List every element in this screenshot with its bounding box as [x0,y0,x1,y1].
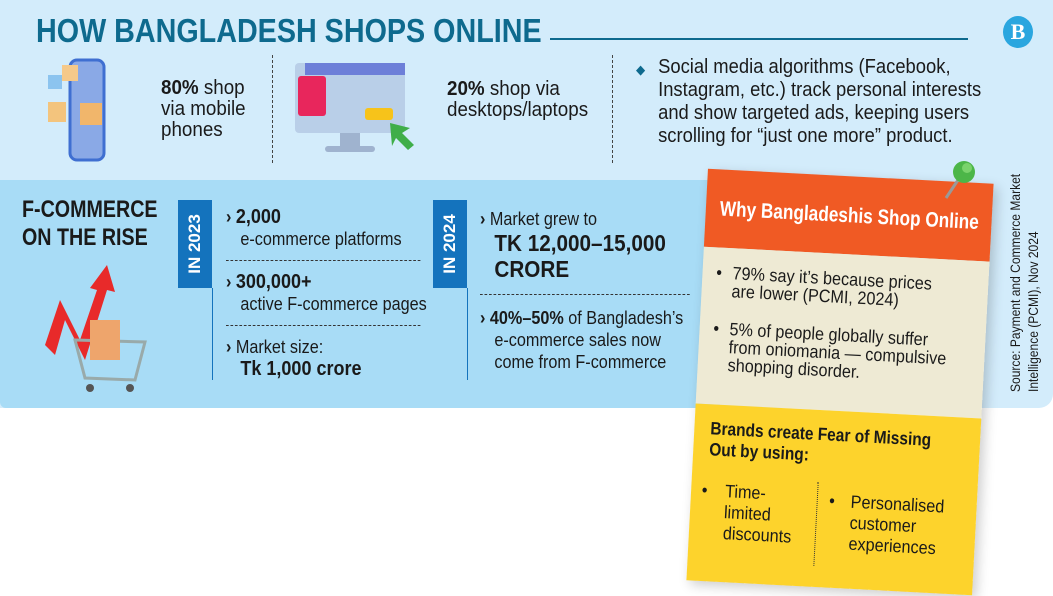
heading: ON THE RISE [22,224,148,251]
card facts: 79% say it’s because prices [732,263,932,294]
card fomo: Brands create Fear of Missing [710,418,932,450]
card fomo: • [701,480,708,500]
text: 20% desktop: 20% shop via [447,78,560,100]
text: social media: Instagram, etc.) track personal interests [658,79,981,101]
card header [704,169,994,262]
2023 items: e-commerce platforms [240,229,402,249]
text: 80% mobile: 80% shop [161,77,245,99]
card fomo [686,403,981,595]
source: Source: Payment and Commerce Market [1007,174,1023,392]
heading: F-COMMERCE [22,196,158,223]
card facts: shopping disorder. [727,355,860,382]
card fomo: Time- [725,481,766,503]
card facts: from oniomania — compulsive [728,337,947,369]
2023 items [226,206,427,380]
card: why bangladeshis shop [686,169,994,595]
text: social media [636,56,981,147]
tab: in 2023: IN 2023 [185,214,204,274]
2024 items: e-commerce sales now [494,330,661,350]
card fomo: Personalised [850,492,945,517]
card fomo: discounts [722,523,792,547]
card fomo: limited [724,502,771,525]
text: 80% mobile [161,77,246,141]
heading [22,196,158,251]
text: 80% mobile: phones [161,119,223,141]
2024 items [480,209,690,372]
2024 items: TK 12,000–15,000 [494,230,666,256]
logo: B [1011,19,1025,44]
2023 items: active F-commerce pages [240,294,427,314]
text: social media: Social media algorithms (Facebook, [658,56,951,78]
background panel [0,0,1053,408]
tab: in 2024: IN 2024 [440,214,459,274]
card facts: • [713,318,720,339]
text: 20% desktop [447,78,588,121]
card fomo: • [829,491,835,511]
text: social media: scrolling for “just one more” product. [658,125,953,147]
2023 items: ›Market size: [226,337,323,357]
text: 80% mobile: via mobile [161,98,246,120]
icon: cart with arrow [45,265,147,392]
icon: phone [48,58,106,162]
icon: desktop [295,63,414,152]
2023 items: ›2,000 [226,206,281,228]
card header: Why Bangladeshis Shop Online [719,197,979,234]
text: social media: and show targeted ads, keeping users [658,102,969,124]
card facts: are lower (PCMI, 2024) [731,281,899,310]
2023 items: Tk 1,000 crore [240,358,361,380]
source [1007,174,1041,392]
icon: pushpin [944,161,975,199]
card fomo: customer [849,513,917,536]
2024 items: ›Market grew to [480,209,597,229]
text: social media: ◆ [636,62,645,77]
title: HOW BANGLADESH SHOPS ONLINE [36,12,542,49]
tab: in 2024 [433,200,467,288]
2024 items: come from F-commerce [494,352,666,372]
tab: in 2023 [178,200,212,288]
text: 20% desktop: desktops/laptops [447,99,588,121]
2024 items: ›40%–50% of Bangladesh’s [480,308,683,328]
panel: f-commerce strip [0,180,720,408]
card facts [696,247,990,418]
card fomo: experiences [848,534,936,558]
2023 items: ›300,000+ [226,271,311,293]
card fomo: Out by using: [709,439,809,464]
source: Intelligence (PCMI), Nov 2024 [1025,231,1041,392]
logo [1003,16,1033,48]
card facts: 5% of people globally suffer [729,319,929,350]
2024 items: CRORE [494,256,569,282]
card facts: • [716,262,723,283]
